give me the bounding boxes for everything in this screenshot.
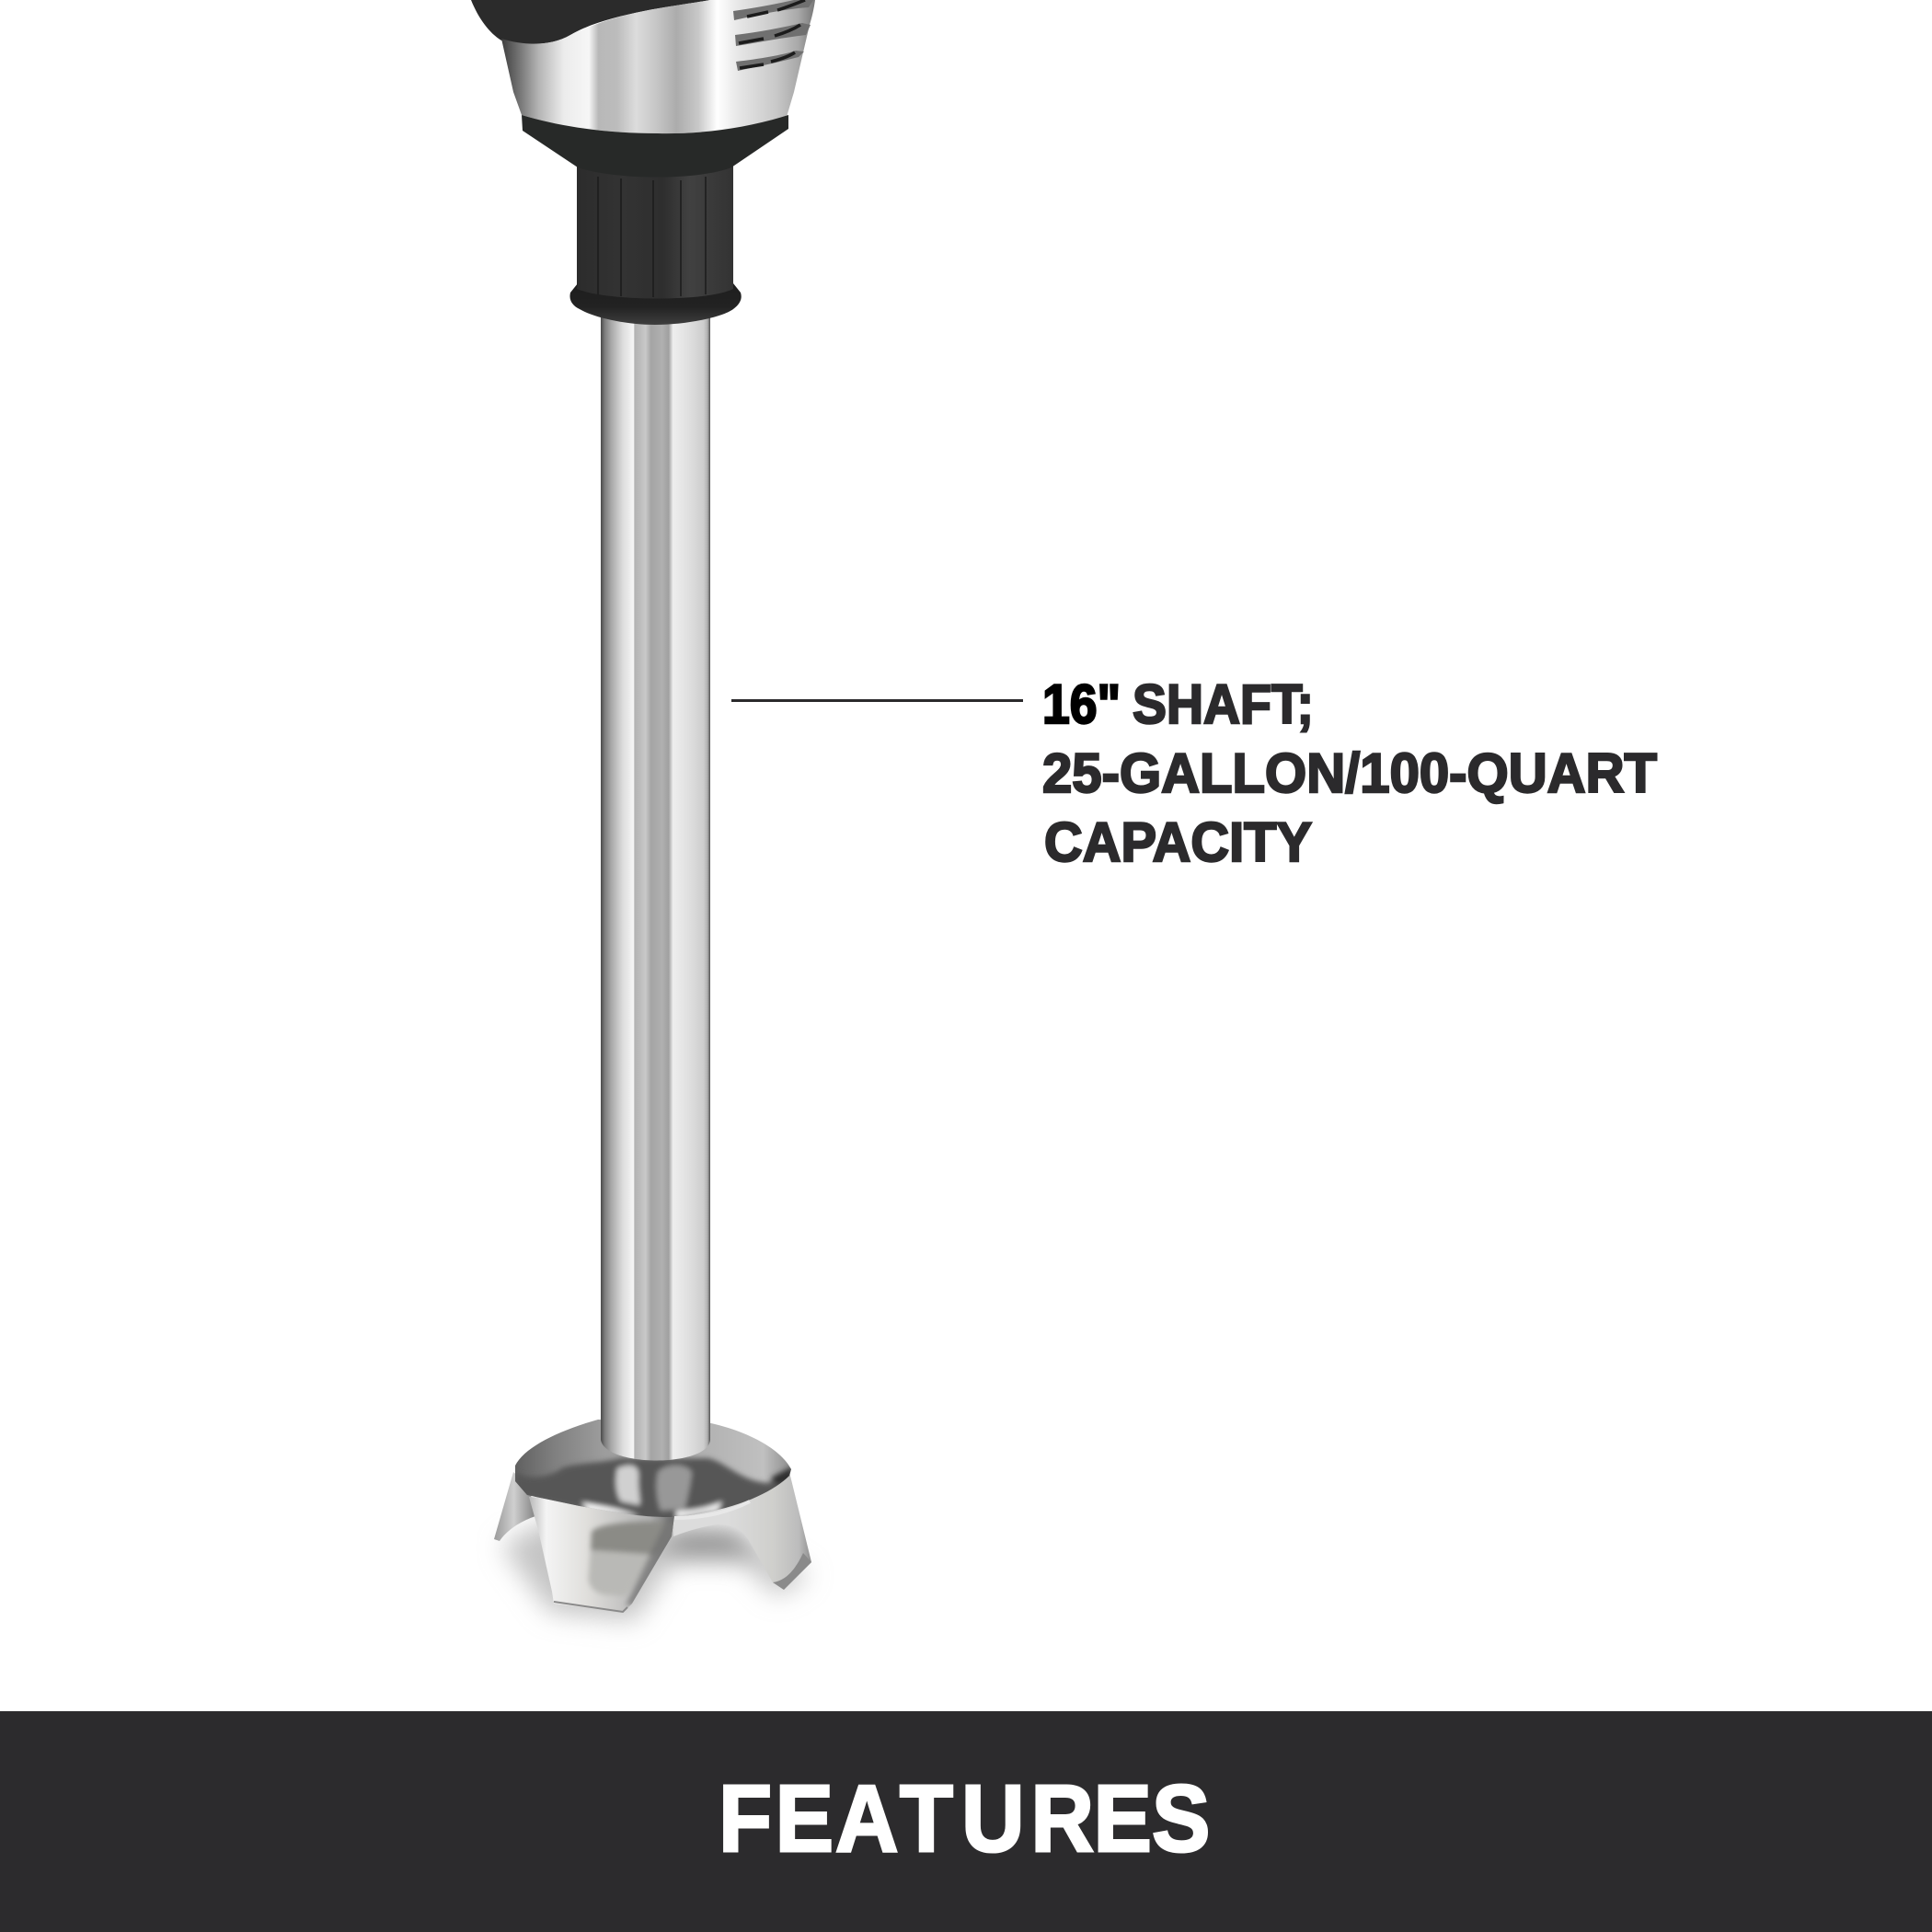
blade guard — [494, 1408, 811, 1613]
dome — [515, 1420, 791, 1517]
housing vents — [733, 0, 813, 71]
rim highlight — [674, 1501, 750, 1518]
shaft foot — [601, 1408, 710, 1461]
shadow under blade guard — [501, 1518, 810, 1621]
footer heading: FEATURES — [719, 1765, 1210, 1871]
callout number: 16" — [1042, 673, 1121, 735]
callout text — [1042, 673, 1657, 873]
rubber ring — [569, 283, 742, 325]
ribbed nut — [577, 156, 733, 304]
callout line three: CAPACITY — [1044, 811, 1312, 873]
black collar — [522, 115, 788, 177]
footer band — [0, 1711, 1932, 1932]
leg foot edge — [554, 1602, 627, 1612]
right leg tip — [773, 1553, 811, 1590]
steel shaft — [601, 304, 710, 1457]
back left leg — [494, 1472, 535, 1541]
callout line two: 25-GALLON/100-QUART — [1042, 742, 1657, 804]
front left leg — [529, 1497, 674, 1613]
callout line one: SHAFT; — [1133, 673, 1314, 735]
leg reflection — [589, 1518, 681, 1605]
product: immersion blender — [471, 0, 815, 1621]
right leg — [673, 1472, 811, 1590]
steel motor housing — [501, 0, 815, 133]
callout leader line — [731, 699, 1023, 702]
motor body grip — [471, 0, 710, 44]
